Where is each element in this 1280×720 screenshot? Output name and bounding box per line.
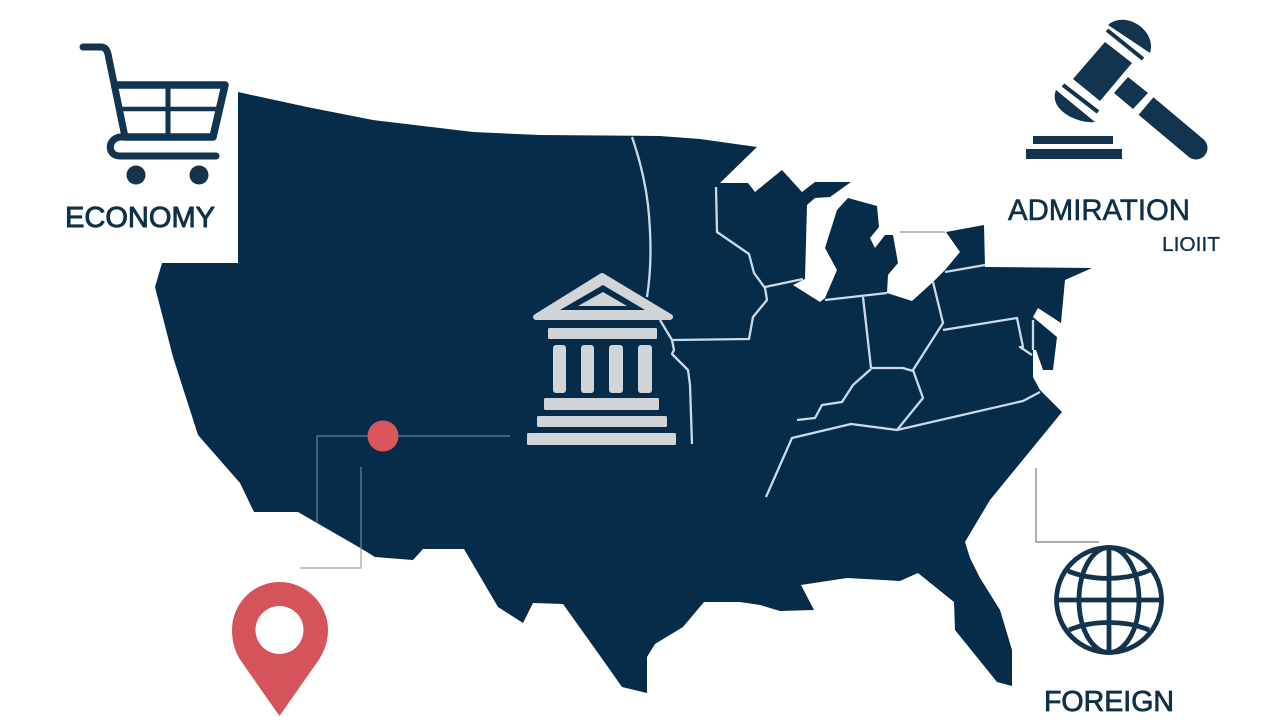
icon: shopping cart	[83, 47, 225, 184]
icon: capitol building	[527, 276, 676, 445]
marker: red dot	[368, 420, 398, 452]
connector: foreign leader	[1036, 468, 1099, 542]
label: light: LIOIIT	[1162, 234, 1220, 256]
icon: gavel	[1026, 20, 1208, 160]
label: foreign: FOREIGN	[1044, 686, 1174, 718]
label: economy: ECONOMY	[65, 202, 215, 234]
panel: United States map	[155, 92, 1092, 693]
label: administration: ADMIRATION	[1008, 194, 1190, 227]
icon: globe	[1056, 548, 1162, 652]
state borders	[632, 137, 1040, 497]
connector: administration leader	[900, 231, 945, 233]
icon: location pin	[232, 582, 328, 716]
map silhouette	[155, 92, 1092, 693]
connector: location leader lines	[300, 436, 510, 568]
